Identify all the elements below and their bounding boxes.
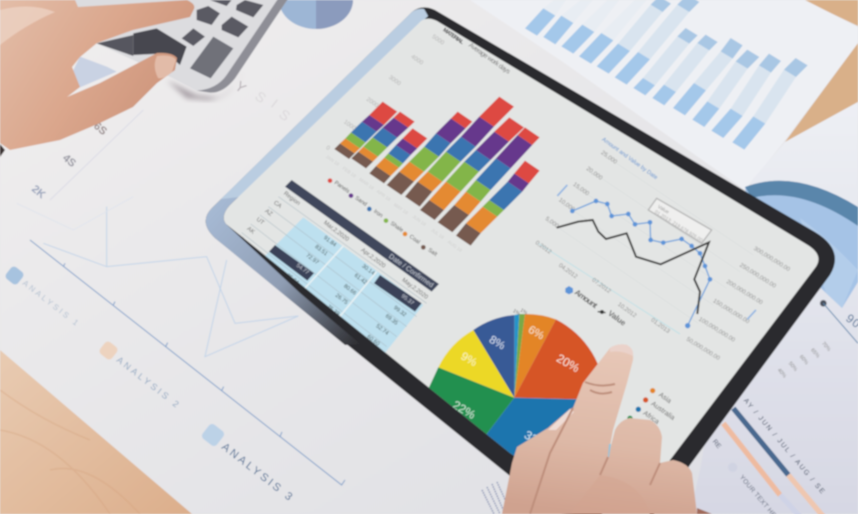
- table values: 52.74: [374, 323, 389, 337]
- thumbnail: [155, 56, 176, 78]
- left axis labels: 04,2012: [557, 263, 579, 281]
- table values: 26.75: [334, 293, 349, 306]
- data table: [236, 180, 439, 363]
- printed text lines on paper at bottom centre: [482, 482, 508, 514]
- left axis labels: 20,000: [585, 166, 604, 182]
- tooltip: [648, 198, 712, 244]
- table header band: [285, 180, 439, 292]
- paper seen between fingers: [73, 57, 117, 87]
- table values: 85.04: [285, 273, 300, 286]
- bar chart axis labels: JUL 18: [430, 228, 445, 240]
- blue pie on paper top: [279, 0, 353, 29]
- pie chart: 1%: [519, 308, 529, 317]
- line chart legend: Amount: [573, 288, 599, 310]
- slice 9%: [438, 330, 514, 398]
- bar chart axis labels: JUN 18: [411, 214, 427, 227]
- stacked bar chart: [334, 97, 540, 246]
- table labels: Apr,2,2020: [359, 247, 387, 270]
- faded letters below calculator: S: [276, 106, 293, 124]
- table values: 99.32: [392, 305, 407, 318]
- timeline and labels on right paper: RE: [711, 438, 722, 450]
- index fingernail: [610, 344, 633, 356]
- right paper with timeline: [690, 102, 858, 514]
- tablet screen: [200, 0, 840, 514]
- bar chart axis labels: 3000: [387, 75, 402, 88]
- bar chart axis labels: MAY 18: [393, 202, 409, 216]
- slice 8%: [473, 315, 514, 398]
- table labels: UT: [255, 217, 265, 227]
- bar chart legend: Sand: [354, 195, 368, 208]
- slice 33%: 33%: [522, 428, 550, 452]
- tablet left silver edge: [206, 9, 428, 345]
- table labels: Region: [282, 191, 301, 207]
- bar chart legend: Salt: [426, 247, 438, 258]
- line chart legend: Value: [606, 309, 628, 328]
- left axis labels: 07,2012: [590, 277, 612, 295]
- bar chart axis labels: 4000: [410, 54, 424, 67]
- faded letters below calculator: I: [268, 96, 281, 111]
- legend: analysis 2: ANALYSIS 2: [115, 355, 181, 409]
- timeline and labels on right paper: AY / JUN / JUL / AUG / SE: [742, 397, 826, 496]
- faded letters below calculator: Y: [232, 78, 250, 97]
- slice 8%: 8%: [487, 334, 507, 352]
- slice 22%: 22%: [450, 398, 478, 422]
- left axis labels: 01,2013: [649, 317, 671, 335]
- wood desk top right: [785, 0, 858, 142]
- timeline and labels on right paper: 60%: [798, 354, 809, 366]
- left paper blurred axis digits: 6S: [91, 120, 109, 138]
- table values: 91.84: [322, 235, 337, 248]
- tablet body: [206, 7, 835, 514]
- bar 7: [438, 127, 540, 232]
- legend: analysis 1: [4, 265, 80, 328]
- bar chart axis labels: 0: [325, 145, 331, 152]
- pie chart: [428, 308, 598, 456]
- pale bar tops: [543, 0, 647, 40]
- knuckle and finger creases: [530, 382, 660, 514]
- bar chart axis labels: AUG 18: [447, 239, 463, 253]
- highlighted cell 95.37: [374, 275, 422, 312]
- line chart: [534, 137, 791, 362]
- chart heading: Average work days: [467, 42, 512, 76]
- left paper blurred axis digits: [29, 120, 109, 201]
- slice 22%: [428, 366, 515, 435]
- table values: 75.39: [325, 304, 340, 317]
- bar chart legend: Shale: [389, 221, 404, 234]
- timeline and labels on right paper: 40%: [776, 367, 787, 380]
- left axis labels: 25,000: [599, 150, 618, 166]
- black value line: [557, 220, 709, 314]
- left paper blurred axis digits: 2K: [29, 183, 48, 201]
- slice 6%: 6%: [526, 324, 546, 342]
- right axis labels: 150,000,000.00: [712, 298, 751, 326]
- bar 4: [387, 112, 472, 195]
- table labels: CA: [272, 200, 282, 210]
- bar chart axis labels: MAR 18: [358, 177, 375, 191]
- pie legend: Australia: [649, 401, 676, 422]
- left axis labels: 10,000: [557, 197, 576, 213]
- donut chart on right paper: [745, 181, 858, 308]
- paper with blue bar chart, top right: [470, 0, 858, 190]
- faded letters below calculator: S: [252, 88, 269, 106]
- slice 9%: 9%: [458, 351, 479, 369]
- chart heading: MATERIAL: [441, 27, 465, 46]
- wood desk bottom left: [0, 350, 192, 514]
- table labels: AZ: [263, 208, 273, 218]
- left paper line chart and axis: [17, 110, 345, 485]
- bar chart legend: [328, 178, 438, 258]
- right axis labels: 100,000,000.00: [697, 317, 736, 344]
- bar 8: [456, 161, 540, 246]
- table values: 72.97: [304, 253, 319, 266]
- legend: analysis 3: [200, 422, 294, 503]
- axis titles: [557, 185, 756, 319]
- bar chart axis labels: APR 18: [376, 189, 392, 202]
- calculator: [72, 0, 288, 100]
- right axis labels: [685, 246, 791, 362]
- right axis labels: 200,000,000.00: [725, 279, 764, 307]
- legend: analysis 2: [98, 340, 181, 409]
- shadow on hand: [570, 475, 650, 514]
- table labels: HI: [236, 235, 245, 243]
- left axis labels: 5,000: [544, 216, 560, 230]
- bar chart axis labels: 5000: [430, 34, 445, 47]
- timeline and labels on right paper: [711, 300, 858, 514]
- table labels: Mar,2,2020: [322, 220, 350, 243]
- slice 20%: [514, 319, 605, 400]
- bar 6: [420, 117, 524, 220]
- left paper blurred axis digits: 4S: [60, 152, 78, 170]
- bar chart axis labels: FEB 18: [341, 166, 357, 179]
- left axis labels: 15,000: [571, 182, 590, 198]
- bar 2: [351, 112, 415, 168]
- chart title: Amount and Value by Date: [600, 137, 658, 181]
- pie legend: [627, 388, 676, 426]
- bar 3: [369, 128, 427, 183]
- timeline and labels on right paper: 50%: [787, 361, 798, 373]
- bar chart axis labels: JAN 18: [325, 154, 341, 167]
- left axis labels: [534, 150, 671, 335]
- chart heading: [441, 27, 512, 76]
- bar 1: [334, 102, 397, 159]
- solid bar bases: [525, 8, 765, 150]
- table values: 83.51: [313, 244, 328, 257]
- left axis labels: 10,2012: [616, 302, 638, 320]
- timeline and labels on right paper: 65%: [809, 347, 821, 360]
- bar chart axis labels: 2000: [365, 97, 380, 110]
- table values: 30.14: [360, 263, 375, 277]
- bar caps: [651, 0, 808, 77]
- right axis labels: 250,000,000.00: [738, 263, 777, 290]
- highlighted cell 54.77: 54.77: [295, 263, 310, 276]
- right hand touching screen: [502, 344, 712, 514]
- table header band: Date / Confirmed: [387, 253, 435, 289]
- table labels: AK: [245, 226, 255, 236]
- bar 5: [405, 97, 514, 207]
- watch strap: [0, 144, 5, 157]
- bar chart axis labels: 1000: [342, 119, 357, 132]
- table labels: May,2,2020: [400, 277, 429, 301]
- table values: 80.66: [342, 283, 357, 297]
- pie chart: 1%: [512, 308, 521, 317]
- legend: analysis 1: ANALYSIS 1: [21, 278, 80, 328]
- table values: 61.42: [353, 273, 368, 286]
- right axis labels: 300,000,000.00: [752, 246, 791, 273]
- highlighted cell 95.37: 95.37: [400, 293, 415, 307]
- table values: 60.60: [365, 334, 380, 347]
- legend: analysis 3: ANALYSIS 3: [219, 441, 294, 503]
- slice 33%: [486, 396, 577, 456]
- pie legend: Africa: [641, 410, 660, 426]
- slice 20%: 20%: [554, 351, 582, 375]
- line chart legend: [565, 286, 628, 328]
- bar chart legend: Panels: [333, 180, 351, 195]
- bar chart legend: Iron: [372, 209, 384, 219]
- thumb nail: [548, 409, 574, 430]
- pie legend: Asia: [657, 392, 672, 405]
- timeline and labels on right paper: 70%: [820, 341, 832, 353]
- table labels: [236, 191, 429, 301]
- tooltip: Value: [656, 204, 670, 216]
- left axis labels: 0,2012: [534, 240, 553, 256]
- faded letters below calculator: [232, 78, 293, 124]
- right axis labels: 50,000,000.00: [685, 337, 721, 362]
- table values: [285, 235, 407, 347]
- bar chart axis labels: [325, 34, 463, 253]
- table values: 69.35: [384, 313, 399, 327]
- bar chart legend: Coal: [408, 234, 421, 246]
- slice 6%: [514, 314, 556, 398]
- highlight on back of hand: [0, 6, 55, 45]
- blue amount line: [570, 199, 712, 328]
- screen sliver between fingers: [608, 444, 611, 457]
- pale bar bodies: [618, 5, 796, 124]
- left hand pressing calculator: [0, 0, 194, 157]
- tooltip: 01,2013: 219,678,926.00: [653, 209, 704, 244]
- highlighted cell 54.77: [269, 245, 314, 281]
